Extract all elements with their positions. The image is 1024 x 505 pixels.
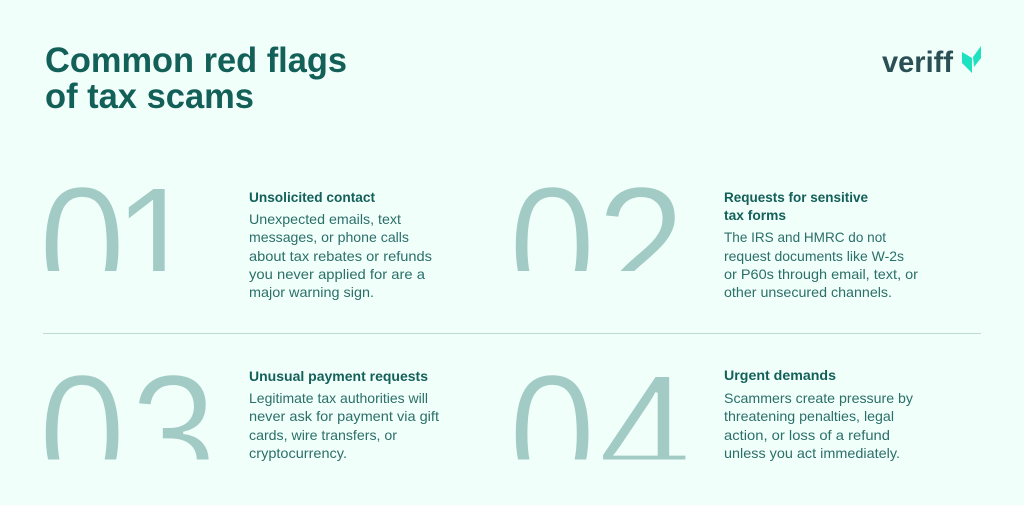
body text [724, 229, 918, 300]
body text: never ask for payment via gift [249, 408, 439, 424]
number 02: 0 [508, 151, 596, 341]
body text: request documents like W-2s [724, 248, 904, 264]
heading: Unusual payment requests [249, 369, 428, 384]
title [45, 41, 347, 116]
body text: you never applied for are a [249, 266, 425, 282]
logo: veriff [882, 46, 981, 79]
body text: action, or loss of a refund [724, 427, 890, 443]
panel: 02 sensitive tax forms [516, 187, 918, 297]
body text: other unsecured channels. [724, 284, 892, 300]
heading: Urgent demands [724, 368, 836, 383]
body text: The IRS and HMRC do not [724, 229, 886, 245]
body text: messages, or phone calls [249, 229, 409, 245]
number 02 [516, 187, 675, 271]
panel: 04 urgent demands [516, 370, 913, 461]
title: Common red flags [45, 41, 347, 80]
body text: cryptocurrency. [249, 445, 347, 461]
panel: 03 unusual payment requests [46, 371, 439, 461]
heading [724, 190, 868, 223]
body text: Legitimate tax authorities will [249, 390, 428, 406]
logo wordmark: veriff [882, 46, 954, 79]
number 04 [516, 375, 686, 460]
number 01 [46, 187, 165, 271]
heading: tax forms [724, 208, 786, 223]
body text: major warning sign. [249, 284, 374, 300]
body text [724, 390, 913, 461]
body text: unless you act immediately. [724, 445, 900, 461]
title: of tax scams [45, 77, 254, 116]
heading: Unsolicited contact [249, 190, 375, 205]
icon: veriff leaf [962, 46, 981, 73]
body text [249, 390, 439, 461]
body text: or P60s through email, text, or [724, 266, 918, 282]
body text: Scammers create pressure by [724, 390, 913, 406]
number 02: 2 [596, 152, 686, 342]
body text: cards, wire transfers, or [249, 427, 397, 443]
heading: Requests for sensitive [724, 190, 868, 205]
panel: 01 unsolicited contact [46, 187, 432, 300]
number 01: 1 [112, 151, 200, 341]
body text [249, 211, 432, 300]
number 01: 0 [38, 151, 126, 341]
body text: about tax rebates or refunds [249, 248, 432, 264]
number 03 [46, 375, 209, 460]
body text: threatening penalties, legal [724, 408, 894, 424]
body text: Unexpected emails, text [249, 211, 401, 227]
